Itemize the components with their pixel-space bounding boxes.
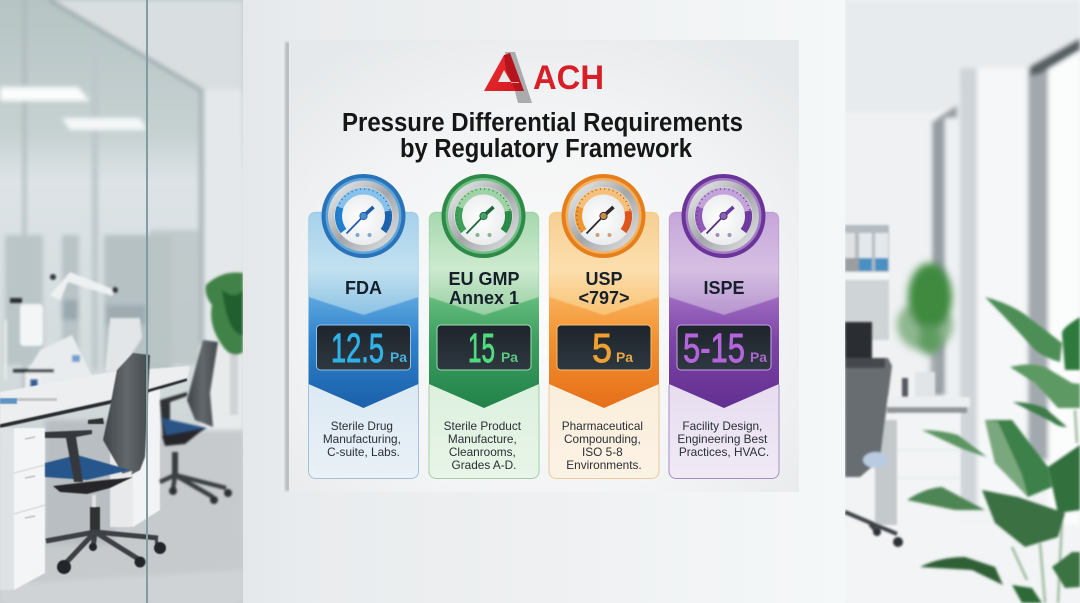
description: Practices, HVAC. xyxy=(679,445,769,459)
description: Compounding, xyxy=(564,432,641,446)
foreground plant xyxy=(907,297,1080,603)
framework name xyxy=(578,269,630,308)
framework name: EU GMP xyxy=(448,269,520,289)
card: USP 797 xyxy=(549,174,659,478)
framework name: Annex 1 xyxy=(449,288,519,308)
blurred plant xyxy=(897,263,953,390)
reading: Pa xyxy=(616,349,633,365)
background: right office xyxy=(845,0,1080,603)
desk with drawers xyxy=(0,366,190,590)
logo wordmark: ACH xyxy=(533,59,604,97)
description: Grades A-D. xyxy=(452,458,516,472)
plant in back corner xyxy=(206,272,243,415)
card lower panel xyxy=(308,380,418,478)
digital display xyxy=(677,325,771,370)
card: FDA xyxy=(308,174,418,478)
logo mark xyxy=(484,52,532,103)
framework name xyxy=(448,269,520,308)
description: C-suite, Labs. xyxy=(327,445,400,459)
microscope equipment xyxy=(4,272,142,392)
far chair xyxy=(160,340,232,504)
title: by Regulatory Framework xyxy=(400,135,693,163)
card ribbon xyxy=(429,212,539,408)
card header tint xyxy=(669,212,779,315)
reading: 15 xyxy=(468,325,495,371)
gauge xyxy=(442,174,526,258)
description: Sterile Drug xyxy=(331,419,393,433)
framework name: FDA xyxy=(345,278,382,298)
reading: Pa xyxy=(501,349,518,365)
card: EU GMP Annex 1 xyxy=(429,174,539,478)
card: ISPE xyxy=(669,174,779,478)
description: Environments. xyxy=(566,458,642,472)
reading xyxy=(592,325,633,371)
logo: ACH xyxy=(484,52,604,103)
digital display xyxy=(557,325,651,370)
description: Engineering Best xyxy=(677,432,768,446)
digital display xyxy=(437,325,531,370)
reading: 5-15 xyxy=(683,325,745,371)
framework name: <797> xyxy=(578,288,630,308)
card header tint xyxy=(429,212,539,315)
digital display xyxy=(316,325,410,370)
gauge xyxy=(682,174,766,258)
gauge xyxy=(562,174,646,258)
desk and chair xyxy=(845,322,970,547)
card ribbon xyxy=(308,212,418,408)
description: Facility Design, xyxy=(682,419,762,433)
poster panel xyxy=(289,40,799,492)
card lower panel xyxy=(549,380,659,478)
framework name: ISPE xyxy=(703,278,745,298)
title xyxy=(342,109,743,163)
description: Manufacture, xyxy=(448,432,517,446)
card header tint xyxy=(549,212,659,315)
description: Manufacturing, xyxy=(323,432,401,446)
wall xyxy=(243,0,845,603)
shelf with binders xyxy=(845,225,889,340)
reading: Pa xyxy=(750,349,767,365)
near chair xyxy=(45,353,166,574)
poster shadow xyxy=(285,42,290,491)
description: Sterile Product xyxy=(444,419,522,433)
description: Cleanrooms, xyxy=(449,445,516,459)
card lower panel xyxy=(669,380,779,478)
title: Pressure Differential Requirements xyxy=(342,109,743,137)
reading: 12.5 xyxy=(331,325,384,371)
description: Pharmaceutical xyxy=(562,419,643,433)
reading: 5 xyxy=(592,325,612,371)
card lower panel xyxy=(429,380,539,478)
card ribbon xyxy=(549,212,659,408)
gauge xyxy=(322,174,406,258)
card ribbon xyxy=(669,212,779,408)
card header tint xyxy=(308,212,418,315)
reading: Pa xyxy=(390,349,407,365)
description: ISO 5-8 xyxy=(582,445,623,459)
background: left office behind glass xyxy=(0,0,243,603)
framework name: USP xyxy=(585,269,623,289)
